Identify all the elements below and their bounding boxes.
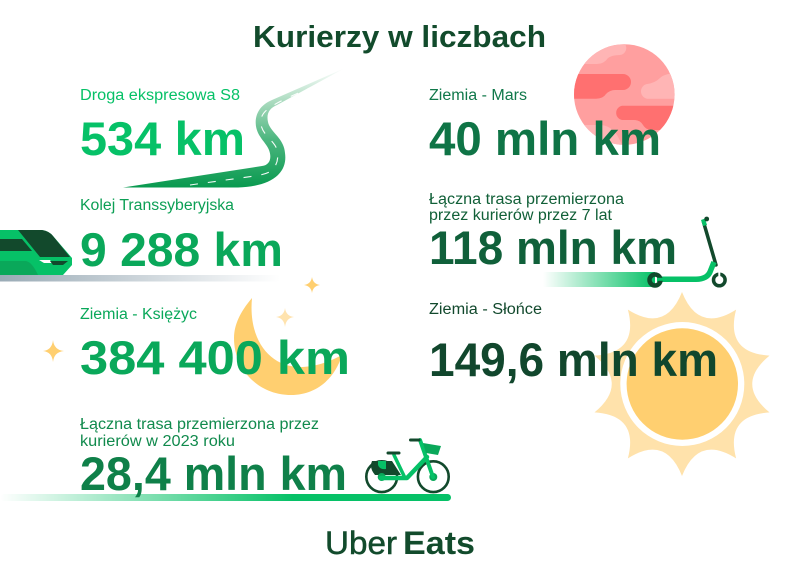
- stat: Ziemia - Słońce: 149,6 mln km: [429, 333, 718, 386]
- stat: Ziemia - Księżyc: 384 400 km: [80, 331, 350, 384]
- stat: 7 years total: 118 mln km: [429, 221, 677, 274]
- icon: winding road: [123, 68, 345, 188]
- stat: 2023 total: Łączna trasa przemierzona przez: [80, 416, 319, 433]
- stat: Ziemia - Słońce: Ziemia - Słońce: [429, 301, 542, 318]
- stat: Droga ekspresowa S8: 534 km: [80, 112, 245, 165]
- title: Kurierzy w liczbach: [253, 19, 546, 54]
- stat: Ziemia - Słońce: [429, 301, 718, 386]
- icon: Mars: [574, 44, 675, 145]
- icon: scooter: [543, 217, 725, 287]
- logo: Uber Eats: Uber: [325, 525, 397, 561]
- stat: Ziemia - Mars: 40 mln km: [429, 112, 661, 165]
- logo: Uber Eats: Eats: [403, 525, 475, 561]
- stat: Droga ekspresowa S8: Droga ekspresowa S8: [80, 87, 240, 104]
- icon: Sun: [594, 292, 770, 476]
- stat: Ziemia - Księżyc: [80, 306, 350, 384]
- stat: 7 years total: przez kurierów przez 7 lat: [429, 207, 613, 224]
- stat: Kolej Transsyberyjska: [80, 197, 283, 276]
- stat: 2023 total: kurierów w 2023 roku: [80, 433, 235, 450]
- icon: train: [0, 230, 280, 282]
- stat: Ziemia - Mars: [429, 87, 661, 165]
- stat: Kolej Transsyberyjska: Kolej Transsyberyjska: [80, 197, 234, 214]
- stat: Kolej Transsyberyjska: 9 288 km: [80, 223, 283, 276]
- stat: Ziemia - Księżyc: Ziemia - Księżyc: [80, 306, 197, 323]
- stat: 7 years total: [429, 191, 677, 274]
- icon: bicycle on ground line: [0, 440, 451, 501]
- stat: 7 years total: Łączna trasa przemierzona: [429, 191, 624, 208]
- icon: moon and stars: [43, 277, 342, 395]
- stat: Droga ekspresowa S8: [80, 87, 245, 165]
- logo: Uber Eats: [325, 525, 475, 561]
- stat: 2023 total: 28,4 mln km: [80, 447, 347, 500]
- stat: Ziemia - Mars: Ziemia - Mars: [429, 87, 527, 104]
- stat: 2023 total: [80, 416, 347, 500]
